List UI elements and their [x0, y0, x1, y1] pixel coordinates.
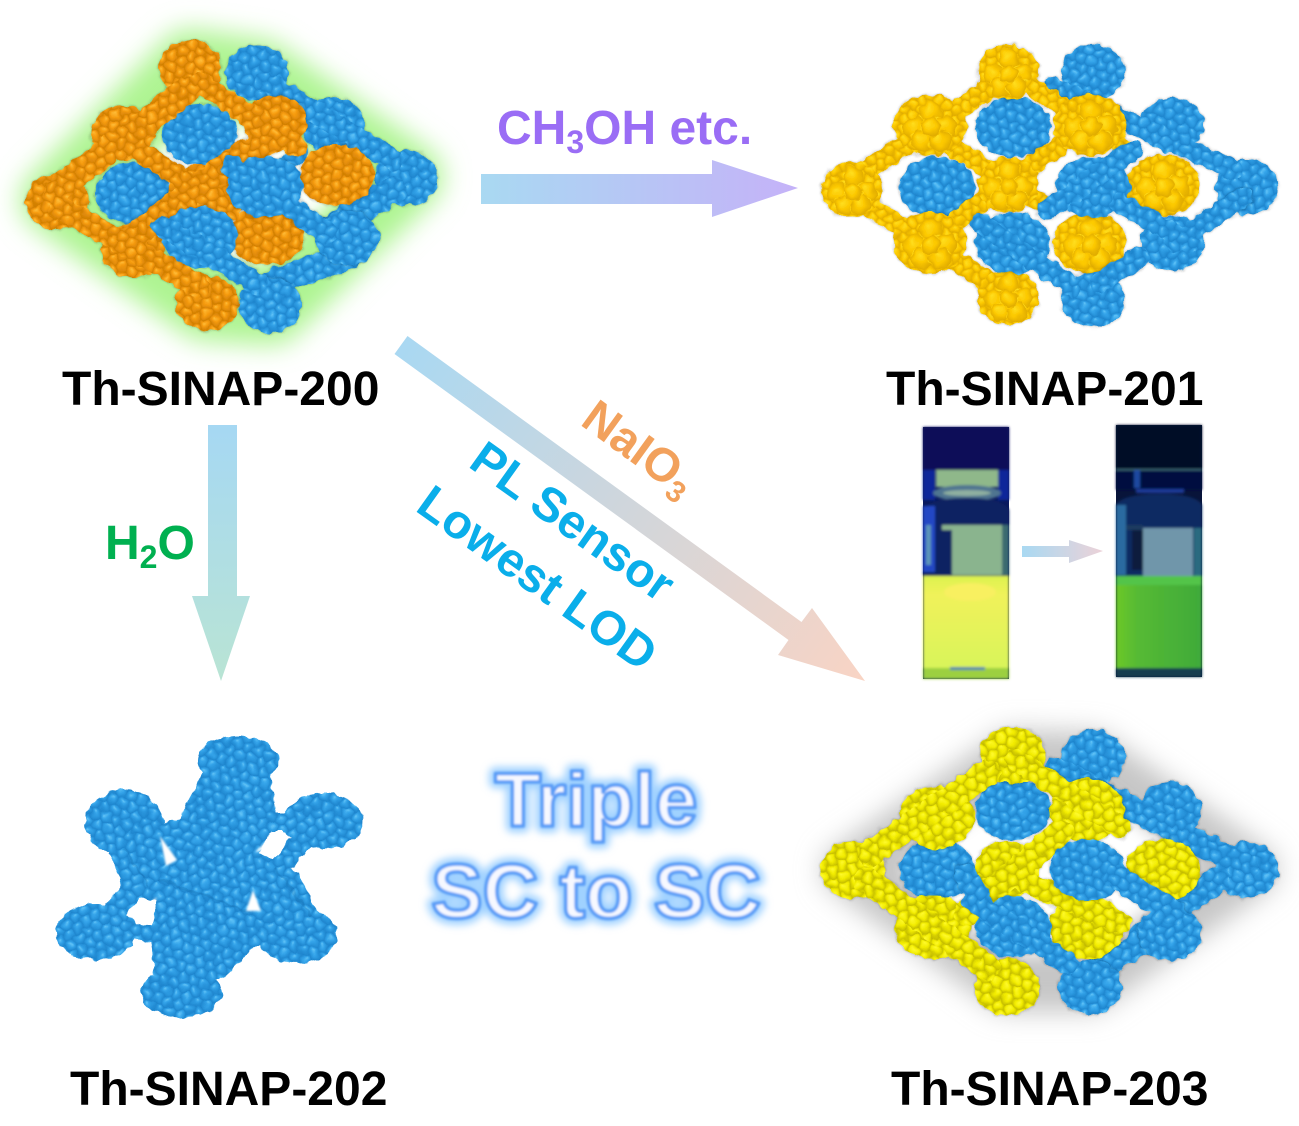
pale interior gaps — [110, 120, 355, 265]
interpenetrated framework — [26, 41, 437, 332]
arrow: CH3OH to Th-SINAP-201 — [481, 160, 798, 217]
photo: bright vial under UV — [923, 427, 1009, 679]
structure: Th-SINAP-201 — [822, 45, 1278, 327]
reagent label: NaIO3: NaIO — [573, 389, 693, 497]
compound label: Th-SINAP-203: Th-SINAP-203 — [891, 1063, 1208, 1116]
outlined face: Triple — [495, 758, 697, 843]
glow layer: SC to SC — [431, 849, 761, 935]
outlined face — [431, 758, 761, 935]
arrow: H2O to Th-SINAP-202 — [192, 425, 250, 681]
reagent label: CH3OH etc.: OH etc. — [584, 102, 752, 155]
structure: Th-SINAP-202 — [55, 736, 363, 1017]
reagent label: H2O: O — [157, 517, 195, 570]
sensor label: PL Sensor: PL Sensor — [461, 432, 684, 612]
compound label: Th-SINAP-202: Th-SINAP-202 — [70, 1063, 387, 1116]
interpenetrated framework — [821, 727, 1278, 1015]
glowing title: Triple SC to SC — [431, 758, 761, 935]
reagent label: H2O: 2 — [140, 539, 157, 575]
structure: Th-SINAP-203 — [821, 727, 1278, 1015]
inner strand shading — [125, 850, 310, 915]
glow layer — [431, 758, 761, 935]
reagent label: NaIO3: 3 — [659, 474, 692, 510]
photo: quenched vial under UV — [1116, 425, 1202, 677]
outlined face: SC to SC — [431, 849, 761, 935]
grey glow — [847, 755, 1253, 987]
pale interior gaps — [900, 790, 1200, 955]
arrow: fluorescence quenching — [1022, 540, 1103, 563]
compound label: Th-SINAP-200: Th-SINAP-200 — [62, 363, 379, 416]
reagent label: H2O: H — [105, 517, 140, 570]
glow layer: Triple — [495, 758, 697, 843]
green glow — [53, 62, 410, 312]
framework pores — [140, 836, 272, 911]
reagent label: CH3OH etc.: CH — [497, 102, 566, 155]
arrow: NaIO3 to Th-SINAP-203 — [394, 336, 865, 681]
reagent label: CH3OH etc.: 3 — [566, 124, 584, 160]
framework body — [55, 736, 363, 1017]
sensor label: Lowest LOD: Lowest LOD — [408, 476, 666, 682]
compound label: Th-SINAP-201: Th-SINAP-201 — [886, 363, 1203, 416]
structure: Th-SINAP-200 — [26, 41, 437, 332]
